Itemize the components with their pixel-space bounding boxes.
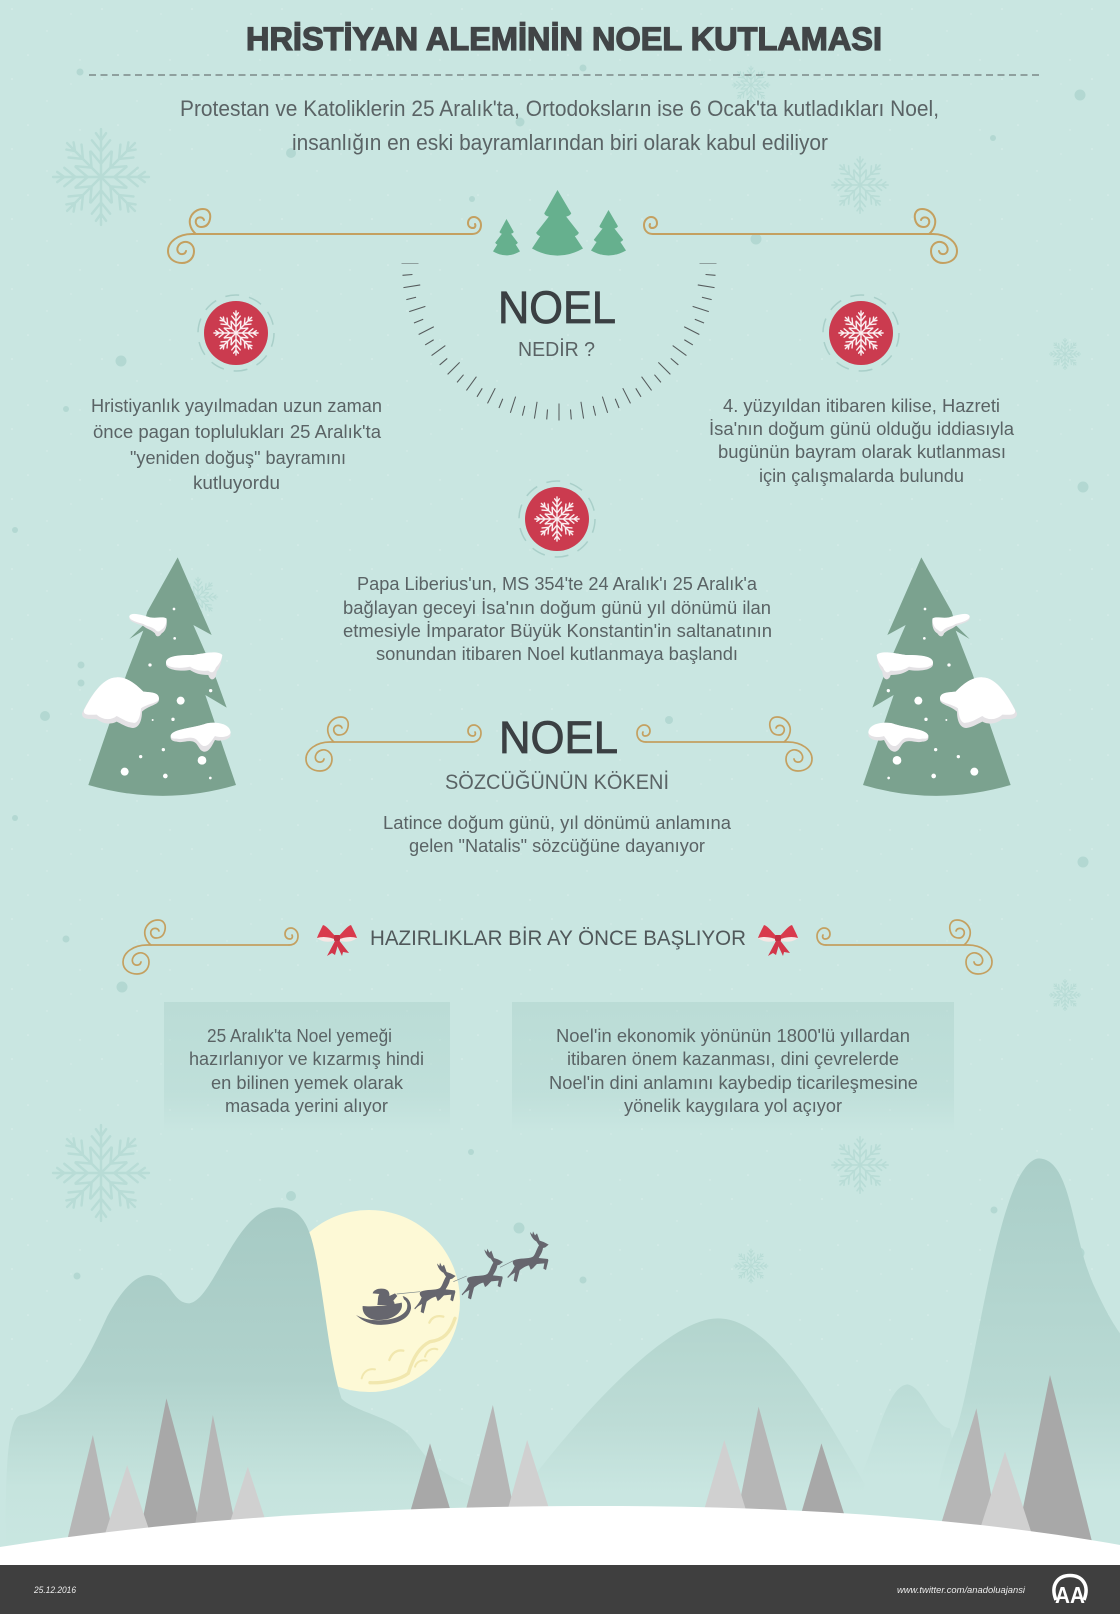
text block: left: kutluyordu	[193, 473, 280, 493]
intro text: insanlığın en eski bayramlarından biri olarak kabul ediliyor	[292, 130, 828, 155]
icon: left bow	[317, 925, 357, 956]
illustration: left snowy tree	[82, 557, 236, 796]
text block: left	[91, 396, 382, 493]
text block: Natalis	[383, 813, 732, 856]
ornament: middle right flourish	[637, 717, 812, 771]
heading: NOEL sözcüğünün kökeni	[445, 712, 669, 794]
ornament: top left flourish	[168, 209, 481, 263]
text block: right	[709, 396, 1015, 486]
footer url: www.twitter.com/anadoluajansi	[897, 1585, 1026, 1596]
text block: right: 4. yüzyıldan itibaren kilise, Hazreti	[723, 396, 1000, 416]
text block: Natalis: gelen "Natalis" sözcüğüne dayanıyor	[409, 836, 705, 856]
heading: NOEL sözcüğünün kökeni: NOEL	[499, 712, 618, 763]
icon: center snowflake badge	[519, 481, 595, 557]
ornament: middle left flourish	[306, 717, 481, 771]
icon: three green trees	[493, 190, 626, 256]
panel: economic aspect: yönelik kaygılara yol açıyor	[624, 1096, 842, 1116]
panel: Christmas dinner: masada yerini alıyor	[225, 1096, 388, 1116]
background snowflakes	[53, 66, 1081, 1283]
illustration: mountains	[6, 1158, 1120, 1550]
heading: NOEL sözcüğünün kökeni: SÖZCÜĞÜNÜN KÖKENİ	[445, 771, 669, 794]
intro text	[180, 96, 939, 155]
intro text: Protestan ve Katoliklerin 25 Aralık'ta, Ortodoksların ise 6 Ocak'ta kutladıkları Noel,	[180, 96, 939, 121]
text block: center: Papa Liberius'un, MS 354'te 24 Aralık'ı 25 Aralık'a	[357, 574, 758, 594]
title: HRİSTİYAN ALEMİNİN NOEL KUTLAMASI	[246, 21, 882, 57]
illustration: snowy hill	[0, 1506, 1120, 1566]
illustration: moon	[278, 1210, 460, 1392]
ornament: preparation left flourish	[123, 920, 298, 974]
heading: NOEL NEDİR	[498, 282, 616, 361]
heading: NOEL NEDİR: NOEL	[498, 282, 616, 333]
text block: center: sonundan itibaren Noel kutlanmaya başlandı	[376, 644, 738, 664]
panel: economic aspect: Noel'in dini anlamını kaybedip ticarileşmesine	[549, 1073, 918, 1093]
panel: economic aspect: Noel'in ekonomik yönünün 1800'lü yıllardan	[556, 1026, 910, 1046]
illustration: right snowy tree	[863, 557, 1017, 796]
text block: center: bağlayan geceyi İsa'nın doğum günü yıl dönümü ilan	[343, 598, 771, 618]
footer date: 25.12.2016	[33, 1585, 77, 1596]
ornament: preparation right flourish	[817, 920, 992, 974]
heading: NOEL NEDİR: NEDİR ?	[518, 338, 595, 361]
footer bar	[0, 1565, 1120, 1614]
ornament: top right flourish	[644, 209, 957, 263]
illustration: sleigh and reindeer	[356, 1231, 549, 1325]
panel: Christmas dinner: 25 Aralık'ta Noel yemeği	[207, 1026, 392, 1046]
icon: right snowflake badge	[823, 295, 899, 371]
panel: Christmas dinner	[164, 1002, 450, 1132]
background dots	[12, 64, 1088, 1284]
icon: left snowflake badge	[198, 295, 274, 371]
text block: Natalis: Latince doğum günü, yıl dönümü anlamına	[383, 813, 732, 833]
text block: right: bugünün bayram olarak kutlanması	[718, 442, 1006, 462]
text block: center	[343, 574, 772, 664]
heading: preparations: HAZIRLIKLAR BİR AY ÖNCE BAŞLIYOR	[370, 927, 746, 950]
icon: right bow	[758, 925, 798, 956]
text block: left: önce pagan toplulukları 25 Aralık'ta	[93, 422, 382, 442]
panel: Christmas dinner: hazırlanıyor ve kızarmış hindi	[189, 1049, 424, 1069]
text block: right: için çalışmalarda bulundu	[759, 466, 964, 486]
text block: center: etmesiyle İmparator Büyük Konstantin'in saltanatının	[343, 621, 772, 641]
text block: left: Hristiyanlık yayılmadan uzun zaman	[91, 396, 382, 416]
panel: Christmas dinner: en bilinen yemek olarak	[211, 1073, 404, 1093]
text block: right: İsa'nın doğum günü olduğu iddiasıyla	[709, 419, 1015, 439]
illustration: grey trees	[66, 1375, 1093, 1545]
text block: left: "yeniden doğuş" bayramını	[130, 448, 346, 468]
logo: Anadolu Ajansı: AA	[1055, 1582, 1085, 1608]
tick-mark semicircle	[407, 263, 711, 415]
panel: economic aspect: itibaren önem kazanması, dini çevrelerde	[567, 1049, 899, 1069]
panel: economic aspect	[512, 1002, 954, 1132]
